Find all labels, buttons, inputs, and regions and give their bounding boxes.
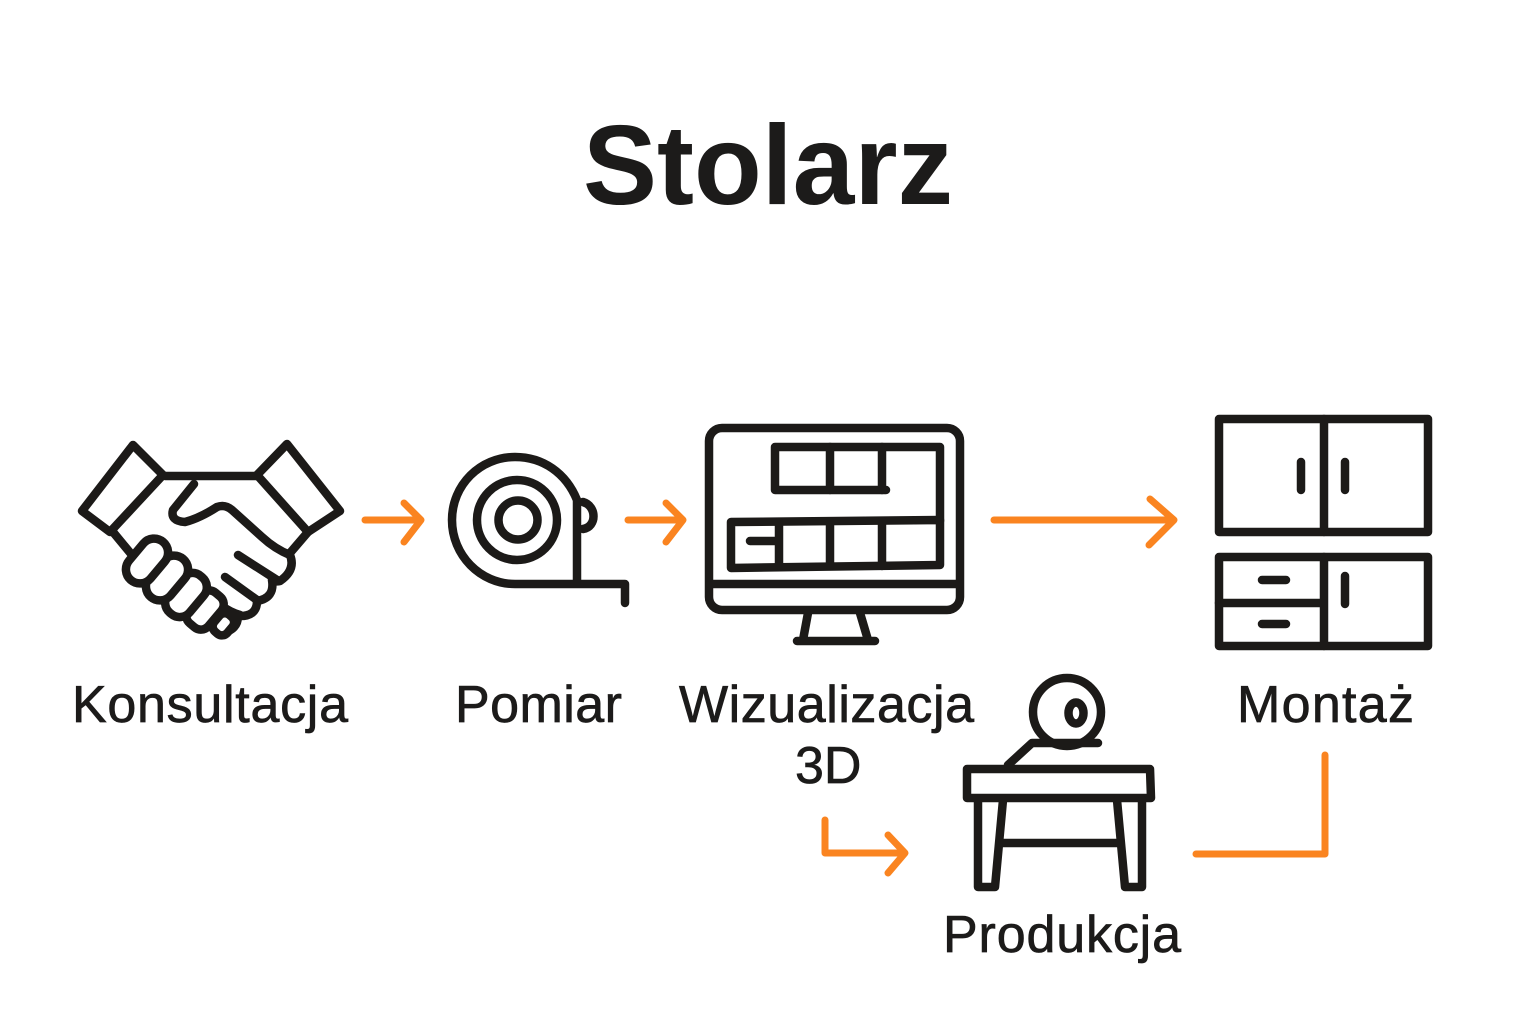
icon: monitor with cabinet design <box>709 428 960 641</box>
arrow: Pomiar to Wizualizacja 3D <box>628 503 683 542</box>
label: Montaż: Montaż <box>1237 676 1414 734</box>
icon: tape measure <box>452 457 625 603</box>
title: Stolarz <box>583 102 953 228</box>
step: Pomiar <box>452 457 625 734</box>
step: Montaż <box>1219 419 1428 734</box>
step: Wizualizacja 3D <box>679 428 974 795</box>
arrow: Wizualizacja 3D to Produkcja <box>825 820 905 873</box>
icon: handshake <box>82 444 340 638</box>
icon: workbench with saw <box>967 678 1151 887</box>
arrow: Konsultacja to Pomiar <box>365 503 421 542</box>
label: Pomiar: Pomiar <box>455 676 622 734</box>
arrow: Wizualizacja 3D to Montaż <box>994 499 1174 545</box>
label: Wizualizacja 3D <box>679 676 974 795</box>
label: Wizualizacja 3D: 3D <box>795 737 861 795</box>
label: Wizualizacja 3D: Wizualizacja <box>679 676 974 734</box>
step: Produkcja <box>943 678 1181 964</box>
label: Produkcja: Produkcja <box>943 906 1181 964</box>
step: Konsultacja <box>72 444 348 734</box>
icon: cabinets <box>1219 419 1428 646</box>
arrow: Produkcja to Montaż <box>1196 755 1325 854</box>
label: Konsultacja: Konsultacja <box>72 676 348 734</box>
